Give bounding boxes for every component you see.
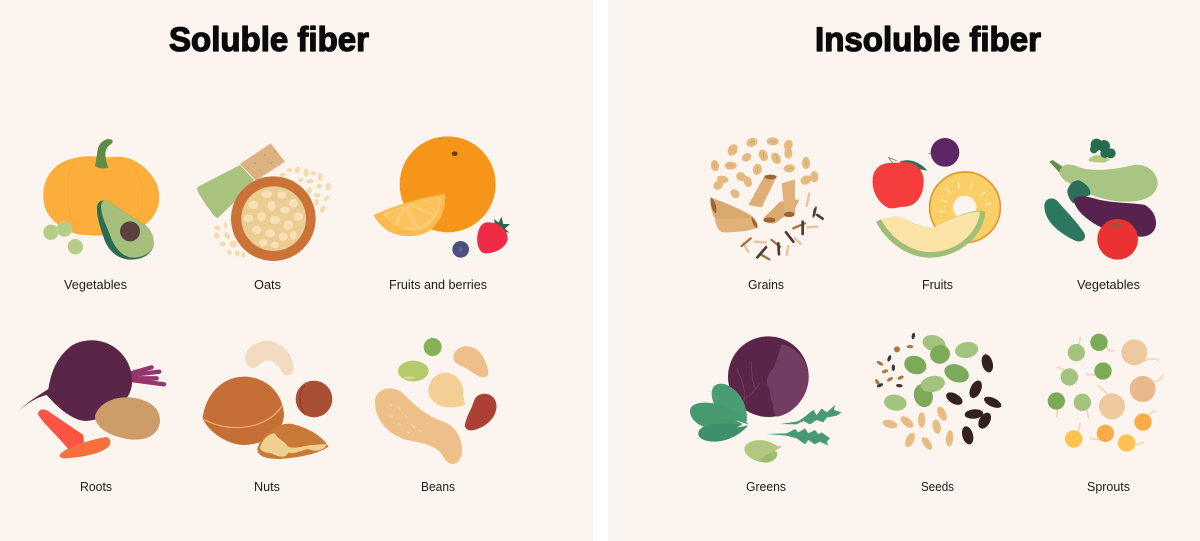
- label: Beans: [421, 479, 455, 494]
- panel: insoluble fiber: [608, 0, 1200, 541]
- label: Oats: [254, 277, 281, 292]
- item: nuts: [203, 341, 332, 494]
- icon: zucchini, eggplant, cucumber, tomato and broccoli: [1044, 139, 1158, 260]
- item: greens: [690, 336, 842, 494]
- item: seeds: [874, 332, 1003, 494]
- label: Fruits: [922, 277, 953, 292]
- item: fruits: [873, 138, 1000, 292]
- icon: assorted sprouts: [1048, 334, 1163, 452]
- icon: oat bar and bowl: [197, 143, 331, 261]
- item: beans: [375, 338, 497, 494]
- item: fruits and berries: [373, 136, 510, 292]
- label: Fruits and berries: [389, 277, 487, 292]
- icon: orange, slice, blueberry and strawberry: [373, 136, 510, 258]
- label: Greens: [746, 479, 786, 494]
- item: vegetables: [1044, 139, 1158, 292]
- icon: beet, potato and carrots: [19, 340, 164, 458]
- item: vegetables: [43, 139, 159, 292]
- icon: pumpkin, avocado and peas: [43, 139, 159, 260]
- icon: assorted beans: [375, 338, 497, 464]
- title: insoluble fiber: Insoluble fiber: [815, 21, 1041, 59]
- icon: assorted seeds: [874, 332, 1003, 451]
- item: grains: [710, 136, 823, 292]
- icon: oats, penne and wild rice: [710, 136, 823, 259]
- label: Seeds: [921, 479, 954, 494]
- icon: cashew, walnut, hazelnut and brazil nut: [203, 341, 332, 459]
- item: roots: [19, 340, 164, 494]
- item: oats: [197, 143, 331, 292]
- label: Grains: [748, 277, 784, 292]
- label: Nuts: [254, 479, 280, 494]
- label: Vegetables: [1077, 277, 1140, 292]
- icon: red cabbage, spinach and arugula: [690, 336, 842, 463]
- label: Roots: [80, 479, 112, 494]
- panel: soluble fiber: [0, 0, 593, 541]
- icon: apple, plum, pineapple and melon: [873, 138, 1000, 258]
- label: Vegetables: [64, 277, 127, 292]
- title: soluble fiber: Soluble fiber: [169, 21, 369, 59]
- item: sprouts: [1048, 334, 1163, 494]
- label: Sprouts: [1087, 479, 1130, 494]
